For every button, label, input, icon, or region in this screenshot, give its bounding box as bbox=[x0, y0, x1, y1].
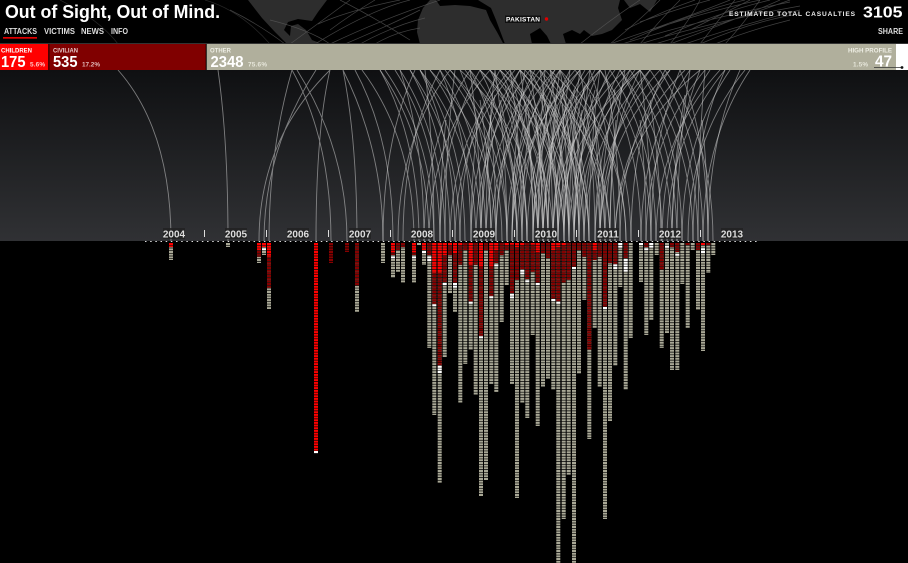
world map bbox=[248, 0, 657, 44]
navigation: VICTIMS bbox=[44, 26, 75, 36]
high profile segment bbox=[848, 44, 908, 70]
share link: SHARE bbox=[878, 26, 903, 36]
civilian casualties bbox=[259, 243, 708, 367]
timeline axis with year labels: 2011 bbox=[597, 230, 619, 240]
timeline axis with year labels: 2009 bbox=[473, 230, 496, 240]
timeline axis with year labels: 2008 bbox=[411, 230, 434, 240]
children segment: 5.6% bbox=[30, 62, 45, 69]
other segment: 2348 bbox=[210, 54, 244, 71]
other segment bbox=[207, 44, 896, 71]
strike arcs bbox=[118, 70, 750, 241]
children segment bbox=[0, 44, 48, 71]
timeline axis with year labels: 2004 bbox=[163, 230, 186, 240]
map label: Pakistan: PAKISTAN bbox=[506, 17, 540, 24]
civilian segment: CIVILIAN bbox=[53, 48, 78, 55]
timeline axis with year labels: 2005 bbox=[225, 230, 248, 240]
navigation: INFO bbox=[111, 26, 128, 36]
total casualties: ESTIMATED TOTAL CASUALTIES bbox=[729, 11, 856, 18]
timeline axis with year labels bbox=[145, 228, 760, 242]
civilian segment bbox=[49, 44, 206, 71]
high profile segment: HIGH PROFILE bbox=[848, 48, 892, 55]
high profile segment: 47 bbox=[875, 54, 892, 70]
total casualties bbox=[729, 4, 903, 22]
children casualties bbox=[171, 243, 703, 451]
title: Out of Sight, Out of Mind. bbox=[5, 1, 220, 22]
children segment: CHILDREN bbox=[1, 48, 32, 55]
flight arcs in header bbox=[60, 0, 800, 44]
timeline axis with year labels: 2013 bbox=[721, 230, 744, 240]
navigation: NEWS bbox=[81, 26, 104, 36]
timeline axis with year labels: 2012 bbox=[659, 230, 682, 240]
timeline axis with year labels: 2006 bbox=[287, 230, 310, 240]
civilian segment: 17.2% bbox=[82, 62, 100, 69]
navigation bbox=[3, 26, 128, 39]
children segment: 175 bbox=[1, 54, 26, 71]
timeline axis with year labels: 2010 bbox=[535, 230, 558, 240]
stats bar bbox=[0, 43, 908, 71]
high profile casualties bbox=[264, 243, 703, 454]
civilian segment: 535 bbox=[53, 54, 78, 71]
map label: Pakistan bbox=[505, 16, 548, 24]
other casualties bbox=[171, 243, 713, 563]
timeline background panel bbox=[0, 70, 908, 241]
total casualties: 3105 bbox=[863, 4, 903, 22]
other segment: 75.6% bbox=[248, 62, 267, 69]
other segment: OTHER bbox=[210, 48, 231, 55]
timeline axis with year labels: 2007 bbox=[349, 230, 372, 240]
high profile segment: 1.5% bbox=[853, 62, 868, 69]
navigation: ATTACKS bbox=[4, 26, 37, 36]
casualty columns bbox=[171, 243, 713, 563]
